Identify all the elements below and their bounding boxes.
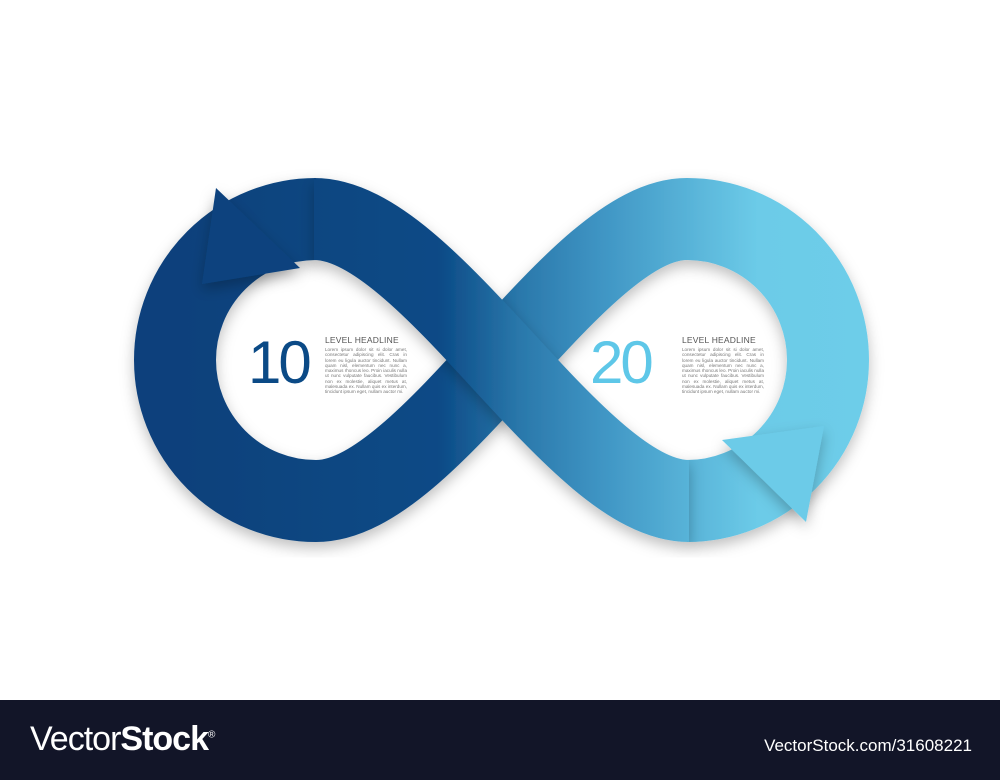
arrow: left head	[202, 188, 300, 284]
footer url: VectorStock.com/31608221	[764, 736, 972, 755]
arrow: right head	[722, 426, 824, 522]
band: under crossing and loops	[175, 219, 828, 501]
block 20	[590, 329, 764, 396]
headline 20: LEVEL HEADLINE	[682, 335, 756, 345]
footer logo: VectorStock®	[30, 720, 214, 758]
block 10	[248, 329, 407, 396]
footer bar	[0, 700, 1000, 780]
number 10: 10	[248, 329, 309, 396]
headline 10: LEVEL HEADLINE	[325, 335, 399, 345]
text 10: Lorem ipsum dolor sit si dolor amet, consectetur adipiscing elit. Cras in lorem eu ligula auctor tincidunt. Nullam quam nisl, elementum nec nunc a, maximus rhoncus leo. Proin iaculis nulla ut nunc vulputate faucibus. Vestibulum non ex molestie, aliquet metus at, malesuada ex. Nullam quis ex interdum, tincidunt ipsum eget, nullam auctor mi.	[325, 347, 407, 394]
text 20: Lorem ipsum dolor sit si dolor amet, consectetur adipiscing elit. Cras in lorem eu ligula auctor tincidunt. Nullam quam nisl, elementum nec nunc a, maximus rhoncus leo. Proin iaculis nulla ut nunc vulputate faucibus. Vestibulum non ex molestie, aliquet metus at, malesuada ex. Nullam quis ex interdum, tincidunt ipsum eget, nullam auctor mi.	[682, 347, 764, 394]
number 20: 20	[590, 329, 651, 396]
band: top crossing	[314, 219, 689, 501]
